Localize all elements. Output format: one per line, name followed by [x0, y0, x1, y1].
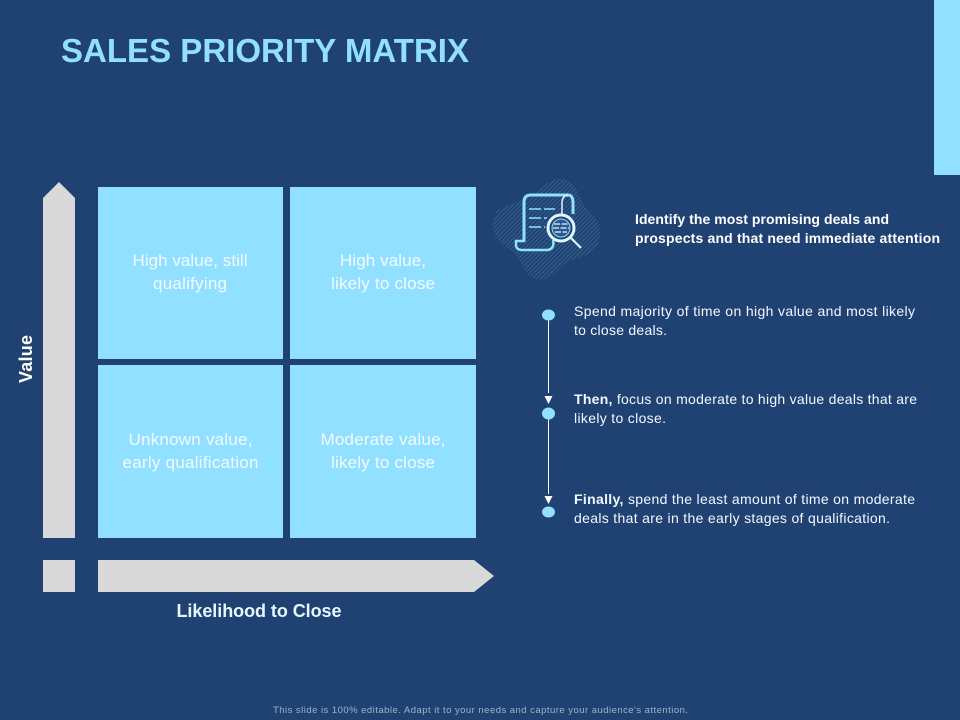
- quadrant: high value, likely to close: High value,: [340, 251, 426, 270]
- step two text: likely to close.: [574, 410, 666, 426]
- step one text: [574, 303, 915, 338]
- step one text: to close deals.: [574, 322, 667, 338]
- quadrant: unknown value, early qualification: [98, 365, 283, 538]
- value axis arrow: [43, 182, 75, 538]
- arrow: step two to three: [544, 496, 552, 504]
- likelihood axis arrow: [98, 560, 494, 592]
- quadrant: high value, likely to close: [290, 187, 476, 359]
- icon: document with magnifying glass: [493, 179, 600, 280]
- quadrant: high value, still qualifying: High value, still: [132, 251, 248, 270]
- step three text: Finally, spend the least amount of time on moderate: [574, 491, 915, 507]
- quadrant: high value, still qualifying: qualifying: [153, 274, 227, 293]
- quadrant: unknown value, early qualification: Unknown value,: [128, 430, 252, 449]
- step three text: [574, 491, 915, 526]
- footer note: This slide is 100% editable. Adapt it to your needs and capture your audience's attention.: [273, 705, 688, 716]
- quadrant: high value, likely to close: likely to close: [331, 274, 435, 293]
- quadrant: unknown value, early qualification: early qualification: [122, 453, 258, 472]
- matrix quadrants: [98, 187, 476, 538]
- step three text: deals that are in the early stages of qualification.: [574, 510, 890, 526]
- title: SALES PRIORITY MATRIX: [61, 32, 469, 69]
- callout heading: prospects and that need immediate attention: [635, 230, 940, 246]
- callout heading: [635, 211, 940, 246]
- step two text: Then, focus on moderate to high value deals that are: [574, 391, 917, 407]
- accent bar: [934, 0, 960, 175]
- axis origin square: [43, 560, 75, 592]
- quadrant: high value, still qualifying: [98, 187, 283, 359]
- value axis label: Value: [16, 335, 36, 383]
- arrow: step one to two: [544, 396, 552, 404]
- callout heading: Identify the most promising deals and: [635, 211, 889, 227]
- timeline: [542, 310, 555, 518]
- step two text: [574, 391, 917, 426]
- quadrant: moderate value, likely to close: Moderate value,: [320, 430, 446, 449]
- step one text: Spend majority of time on high value and most likely: [574, 303, 915, 319]
- quadrant: moderate value, likely to close: likely to close: [331, 453, 435, 472]
- likelihood axis label: Likelihood to Close: [176, 601, 342, 621]
- quadrant: moderate value, likely to close: [290, 365, 476, 538]
